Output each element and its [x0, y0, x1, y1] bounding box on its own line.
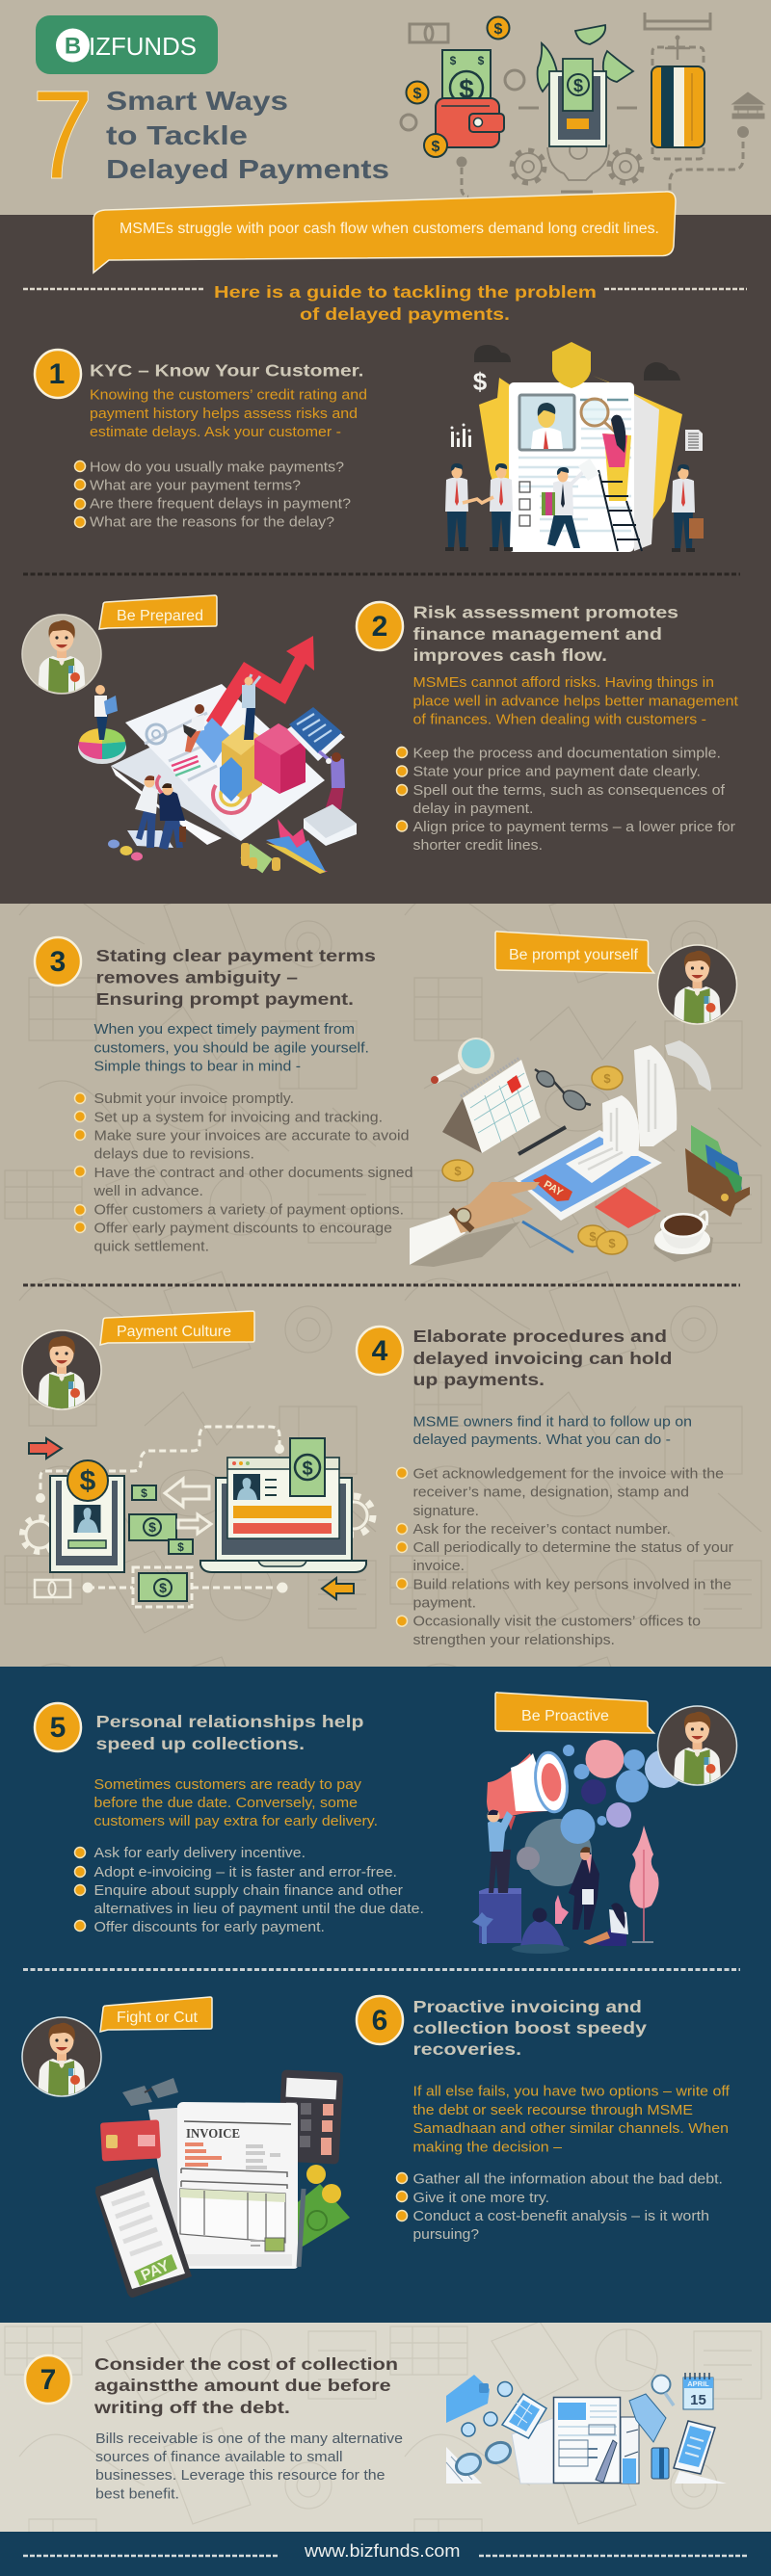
list: step 4 tips: Call periodically to determine the status of your	[412, 1539, 733, 1556]
list: step 1 questions	[75, 459, 351, 531]
text: step 1 intro: Knowing the customers’ credit rating and	[90, 387, 367, 404]
text: step 3 intro: Simple things to bear in mind -	[94, 1059, 301, 1075]
callout: Be prompt yourself: Be prompt yourself	[509, 947, 639, 963]
list: step 6 tips: pursuing?	[412, 2226, 479, 2243]
divider	[23, 1283, 740, 1287]
illustration: invoice and payment flow: $	[148, 1519, 156, 1535]
list: step 4 tips: Ask for the receiver’s contact number.	[412, 1521, 671, 1538]
badge: 1: 1	[49, 358, 65, 390]
callout: Payment Culture: Payment Culture	[117, 1324, 231, 1340]
badge: 1	[35, 350, 81, 398]
illustration: invoice and payment flow: $	[177, 1540, 184, 1554]
list: step 2 tips: shorter credit lines.	[412, 837, 543, 854]
text: step 2 intro: MSMEs cannot afford risks. Having things in	[412, 674, 714, 691]
panel: step 3	[35, 932, 750, 1267]
list: step 3 tips: Make sure your invoices are accurate to avoid	[94, 1127, 410, 1143]
badge: 7	[25, 2355, 71, 2404]
list: step 5 tips: Ask for early delivery incentive.	[94, 1845, 306, 1861]
illustration: money, wallet, card and gears: $	[413, 86, 422, 102]
list: step 5 tips: Adopt e-invoicing – it is faster and error-free.	[94, 1864, 397, 1880]
list: step 2 tips: delay in payment.	[412, 801, 534, 817]
heading: step 1: KYC – Know Your Customer.	[90, 360, 364, 380]
list: step 3 tips: Offer customers a variety of payment options.	[94, 1201, 404, 1218]
illustration: invoice, phone and calculator: INVOICE	[186, 2127, 240, 2142]
illustration: finance desk: 15	[690, 2392, 706, 2408]
badge: 3: 3	[50, 946, 66, 978]
list: step 6 tips	[397, 2171, 723, 2243]
list: step 4 tips: signature.	[412, 1503, 479, 1519]
callout: Be Prepared	[99, 595, 217, 629]
text: step 6 intro: Samadhaan and other similar channels. When	[412, 2120, 729, 2137]
illustration: money, wallet, card and gears: $	[478, 54, 485, 67]
text: step 6 intro: the debt or seek recourse through MSME	[412, 2102, 693, 2118]
list: step 6 tips: Gather all the information about the bad debt.	[412, 2171, 723, 2188]
heading: step 4: Elaborate procedures and	[412, 1327, 667, 1346]
list: step 4 tips: payment.	[412, 1595, 476, 1612]
illustration: invoice and payment flow	[22, 1427, 373, 1607]
text: step 1 intro	[90, 387, 367, 440]
badge: 5	[35, 1703, 81, 1751]
text: step 6 intro: If all else fails, you have two options – write off	[412, 2084, 731, 2100]
list: step 5 tips: Offer discounts for early payment.	[94, 1919, 325, 1935]
list: step 2 tips: Keep the process and documentation simple.	[412, 746, 721, 762]
list: step 1 questions: Are there frequent delays in payment?	[90, 495, 351, 513]
panel background: steps 1 and 2	[0, 215, 771, 904]
text: step 3 intro	[94, 1021, 369, 1075]
list: step 2 tips	[397, 746, 735, 854]
illustration: money, wallet, card and gears: $	[432, 139, 440, 155]
panel: header	[23, 13, 764, 324]
heading: guide: of delayed payments.	[300, 304, 510, 324]
panel: step 1	[35, 342, 704, 552]
text: step 1 intro: payment history helps assess risks and	[90, 406, 358, 422]
text: website: www.bizfunds.com	[304, 2541, 461, 2561]
text: step 3 intro: customers, you should be agile yourself.	[94, 1040, 369, 1057]
illustration: paying an invoice by phone: $	[589, 1229, 597, 1244]
logo: Bizfunds: IZFUNDS	[89, 32, 197, 61]
heading: step 7: againstthe amount due before	[94, 2376, 391, 2395]
avatar	[22, 1330, 101, 1409]
callout: Fight or Cut: Fight or Cut	[117, 2010, 199, 2026]
heading: step 4: up payments.	[412, 1370, 545, 1389]
heading: step 4: delayed invoicing can hold	[412, 1349, 673, 1368]
heading: step 6	[412, 1997, 647, 2059]
illustration: money, wallet, card and gears: $	[459, 74, 474, 104]
heading: step 3: Stating clear payment terms	[96, 946, 376, 965]
heading: step 2: Risk assessment promotes	[412, 603, 678, 622]
callout: Fight or Cut	[100, 1997, 212, 2032]
heading: step 2: improves cash flow.	[412, 645, 607, 665]
heading: guide	[23, 282, 747, 324]
list: step 6 tips: Conduct a cost-benefit analysis – is it worth	[412, 2208, 709, 2224]
text: step 5 intro: before the due date. Conversely, some	[94, 1795, 358, 1811]
callout: Be prompt yourself	[495, 932, 654, 973]
illustration: paying an invoice by phone: $	[603, 1071, 611, 1086]
heading: step 5: Personal relationships help	[96, 1712, 364, 1731]
heading: step 3	[96, 946, 376, 1009]
text: step 2 intro: place well in advance helps better management	[412, 694, 739, 710]
list: step 3 tips: Offer early payment discounts to encourage	[94, 1221, 392, 1237]
list: step 2 tips: State your price and payment date clearly.	[412, 764, 701, 780]
avatar	[657, 1706, 736, 1785]
illustration: paying an invoice by phone: $	[608, 1236, 616, 1250]
text: step 4 intro	[412, 1414, 692, 1448]
text: step 7 body: best benefit.	[95, 2486, 179, 2503]
list: step 4 tips: strengthen your relationships.	[412, 1632, 615, 1648]
heading: step 5: speed up collections.	[96, 1734, 305, 1753]
illustration: invoice and payment flow: $	[141, 1486, 147, 1500]
panel: step 2	[22, 595, 739, 874]
title	[32, 64, 389, 205]
badge: 6	[357, 1996, 403, 2044]
list: step 4 tips: Build relations with key persons involved in the	[412, 1576, 731, 1592]
avatar	[22, 2017, 101, 2096]
panel: step 4	[22, 1311, 733, 1648]
illustration: know your customer: $	[473, 367, 488, 396]
callout: Payment Culture	[100, 1311, 254, 1345]
list: step 3 tips	[75, 1091, 412, 1255]
panel background: footer	[0, 2532, 771, 2576]
list: step 4 tips	[397, 1465, 733, 1648]
heading: step 2: finance management and	[412, 624, 662, 644]
panel: step 5	[35, 1693, 736, 1954]
text: step 4 intro: delayed payments. What you can do -	[412, 1432, 671, 1448]
list: step 2 tips: Align price to payment terms – a lower price for	[412, 819, 735, 835]
list: step 4 tips: Get acknowledgement for the invoice with the	[412, 1465, 724, 1482]
list: step 3 tips: Set up a system for invoicing and tracking.	[94, 1109, 383, 1125]
heading: step 7: writing off the debt.	[93, 2398, 290, 2417]
text: step 2 intro	[412, 674, 739, 728]
title: Smart Ways	[106, 86, 288, 116]
illustration: money, wallet, card and gears: $	[573, 76, 583, 95]
panel: step 6	[22, 1996, 731, 2298]
logo: Bizfunds: B	[65, 33, 81, 60]
list: step 3 tips: Submit your invoice promptly.	[94, 1091, 294, 1107]
text: step 5 intro: Sometimes customers are ready to pay	[94, 1776, 362, 1793]
callout: Be Proactive	[495, 1693, 654, 1733]
divider	[23, 1968, 740, 1971]
text: step 2 intro: of finances. When dealing with customers -	[412, 712, 706, 728]
illustration: risk assessment charts	[78, 636, 357, 874]
badge: 2	[357, 602, 403, 650]
illustration: money, wallet, card and gears: $	[450, 54, 457, 67]
list: step 3 tips: Have the contract and other documents signed	[94, 1165, 412, 1181]
list: step 4 tips: Occasionally visit the customers’ offices to	[412, 1614, 701, 1630]
list: step 5 tips: alternatives in lieu of payment until the due date.	[94, 1901, 424, 1917]
panel background: header	[0, 0, 771, 215]
badge: 4	[357, 1327, 403, 1375]
list: step 2 tips: Spell out the terms, such as consequences of	[412, 782, 726, 799]
list: step 5 tips: Enquire about supply chain finance and other	[94, 1882, 403, 1899]
title: to Tackle	[106, 120, 248, 150]
illustration: invoice and payment flow: $	[302, 1459, 313, 1480]
title: Delayed Payments	[106, 154, 389, 184]
list: step 4 tips: receiver’s name, designation, stamp and	[412, 1485, 689, 1501]
callout: intro	[93, 192, 676, 273]
illustration: money, wallet, card and gears	[401, 13, 764, 197]
title: 7	[32, 64, 93, 205]
badge: 2: 2	[372, 611, 387, 643]
list: step 1 questions: What are the reasons for the delay?	[90, 514, 334, 531]
list: step 1 questions: How do you usually make payments?	[90, 459, 344, 475]
illustration: invoice, phone and calculator: PAY	[139, 2257, 173, 2284]
list: step 6 tips: Give it one more try.	[412, 2190, 549, 2206]
illustration: finance desk: APRIL	[687, 2379, 709, 2388]
panel: step 7	[25, 2354, 727, 2503]
heading: step 3: removes ambiguity –	[96, 968, 298, 987]
illustration: finance desk	[446, 2373, 727, 2484]
heading: guide: Here is a guide to tackling the problem	[214, 282, 597, 302]
panel background: steps 3 and 4	[0, 904, 771, 1667]
text: step 6 intro	[412, 2084, 731, 2156]
heading: step 7	[93, 2354, 398, 2417]
list: step 4 tips: invoice.	[412, 1558, 465, 1574]
illustration: money, wallet, card and gears: $	[494, 21, 503, 38]
list: step 3 tips: delays due to revisions.	[94, 1146, 254, 1163]
panel background: steps 5 and 6	[0, 1667, 771, 2323]
divider	[23, 572, 740, 576]
illustration: invoice and payment flow: $	[159, 1580, 167, 1595]
heading: step 5	[96, 1712, 364, 1753]
heading: step 6: Proactive invoicing and	[412, 1997, 642, 2016]
illustration: paying an invoice by phone: PAY	[542, 1179, 566, 1199]
badge: 3	[35, 937, 81, 986]
badge: 7: 7	[40, 2364, 56, 2396]
callout: intro: MSMEs struggle with poor cash flow when customers demand long credit lines.	[120, 221, 659, 237]
illustration: paying an invoice by phone	[410, 1038, 750, 1267]
text: step 7 body: businesses. Leverage this resource for the	[95, 2467, 386, 2484]
text: step 7 body	[95, 2431, 403, 2503]
text: step 7 body: Bills receivable is one of the many alternative	[95, 2431, 403, 2447]
list: step 3 tips: quick settlement.	[94, 1239, 209, 1255]
badge: 4: 4	[372, 1335, 388, 1367]
illustration: paying an invoice by phone: $	[454, 1164, 462, 1178]
heading: step 6: recoveries.	[412, 2039, 521, 2059]
badge: 6: 6	[372, 2005, 387, 2037]
text: step 4 intro: MSME owners find it hard to follow up on	[412, 1414, 692, 1431]
avatar	[657, 945, 736, 1024]
illustration: invoice, phone and calculator	[95, 2069, 350, 2298]
list: step 1 questions: What are your payment terms?	[90, 477, 301, 493]
logo: Bizfunds	[36, 15, 218, 74]
text: step 6 intro: making the decision –	[412, 2140, 563, 2156]
heading: step 7: Consider the cost of collection	[94, 2354, 398, 2374]
text: step 5 intro: customers will pay extra for early delivery.	[94, 1813, 378, 1829]
callout: Be Prepared: Be Prepared	[117, 608, 203, 624]
text: step 7 body: sources of finance available to small	[95, 2449, 343, 2465]
illustration: invoice and payment flow: $	[80, 1465, 96, 1497]
illustration: megaphone and team	[472, 1740, 683, 1954]
list: step 5 tips	[75, 1845, 424, 1935]
avatar	[22, 615, 101, 694]
badge: 5: 5	[50, 1712, 66, 1744]
panel background: step 7	[0, 2323, 771, 2532]
heading: step 6: collection boost speedy	[412, 2018, 647, 2037]
callout: Be Proactive: Be Proactive	[521, 1708, 609, 1724]
text: step 3 intro: When you expect timely payment from	[94, 1021, 355, 1038]
text: step 1 intro: estimate delays. Ask your customer -	[90, 424, 341, 440]
illustration: know your customer	[445, 342, 704, 552]
text: step 5 intro	[94, 1776, 378, 1829]
list: step 3 tips: well in advance.	[93, 1183, 203, 1199]
heading: step 2	[412, 603, 678, 665]
heading: step 4	[412, 1327, 673, 1389]
heading: step 3: Ensuring prompt payment.	[96, 989, 354, 1009]
